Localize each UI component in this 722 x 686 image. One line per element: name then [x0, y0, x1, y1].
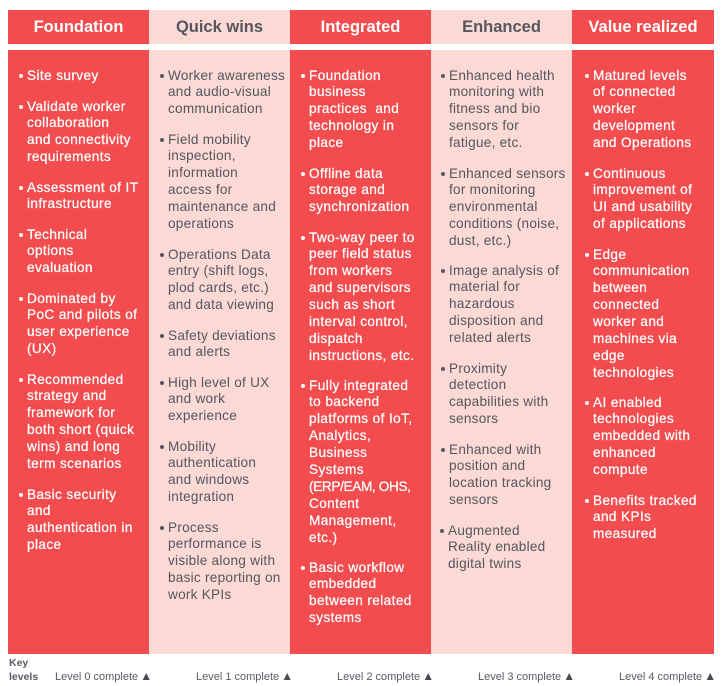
bullet: plod cards, etc.) — [168, 280, 269, 295]
bullet — [19, 290, 137, 358]
bullet: Enhanced health — [449, 68, 555, 82]
bullet — [585, 492, 697, 543]
bullet: Continuous — [593, 166, 666, 180]
bullet: Proximity — [449, 360, 507, 376]
bullet: platforms of IoT, — [309, 411, 413, 426]
key: level 3: Level 3 complete ▲ — [478, 669, 575, 683]
header: Foundation: Foundation — [34, 18, 123, 36]
key levels label: Key — [9, 657, 28, 669]
bullet: AI enabled — [593, 394, 662, 410]
bullet: Fully integrated — [309, 378, 408, 392]
bullet: improvement of — [593, 182, 692, 197]
key levels label: levels — [9, 671, 38, 683]
bullet: Recommended — [27, 372, 124, 386]
bullet: Edge — [593, 246, 626, 262]
bullet: and — [27, 503, 51, 518]
bullet — [585, 246, 690, 382]
bullet — [585, 68, 692, 152]
bullet: Enhanced with — [449, 442, 541, 456]
bullet: information — [168, 165, 238, 180]
bullet: disposition and — [449, 313, 543, 328]
bullet: monitoring with — [449, 84, 544, 99]
bullet: basic reporting on — [168, 570, 281, 585]
bullet: PoC and pilots of — [27, 307, 137, 322]
bullet: peer field status — [309, 246, 412, 261]
bullet: development — [593, 118, 675, 133]
bullet: Benefits tracked — [593, 492, 697, 508]
bullet: Operations Data — [168, 246, 271, 262]
bullet: storage and — [309, 182, 385, 197]
panel: Enhanced — [431, 50, 572, 654]
header: Quick wins: Quick wins — [176, 18, 263, 36]
bullet: worker — [593, 101, 636, 116]
bullet: Assessment of IT — [27, 180, 138, 194]
bullet: Offline data — [309, 166, 383, 180]
bullet: Safety deviations — [168, 328, 276, 342]
bullet: communication — [593, 263, 690, 278]
bullet: and KPIs — [593, 509, 651, 524]
header: Quick wins — [149, 10, 290, 44]
bullet: measured — [593, 526, 657, 541]
bullet — [585, 394, 690, 479]
bullet: practices and — [309, 101, 399, 116]
bullet: between — [593, 280, 647, 295]
bullet: Mobility — [168, 438, 216, 454]
bullet — [19, 486, 133, 554]
bullet — [441, 360, 548, 428]
bullet — [441, 166, 566, 250]
key: level 0: Level 0 complete ▲ — [55, 669, 152, 683]
bullet: Basic workflow — [309, 560, 404, 574]
bullet: Matured levels — [593, 68, 687, 82]
bullet: communication — [168, 101, 263, 116]
bullet: to backend — [309, 394, 380, 409]
bullet: and windows — [168, 472, 249, 487]
bullet: and data viewing — [168, 297, 274, 312]
header: Enhanced — [431, 10, 572, 44]
bullet: and connectivity — [27, 132, 131, 147]
bullet: conditions (noise, — [449, 216, 559, 231]
bullet — [301, 230, 415, 365]
bullet: business — [309, 84, 366, 99]
header: Integrated: Integrated — [321, 18, 400, 36]
bullet: Technical — [27, 226, 87, 242]
bullet: location tracking — [449, 475, 551, 490]
bullet: Worker awareness — [168, 68, 285, 82]
bullet: and alerts — [168, 344, 230, 359]
bullet: sensors — [449, 411, 498, 426]
bullet: requirements — [27, 149, 111, 164]
bullet: hazardous — [449, 296, 515, 311]
key: level 4: Level 4 complete ▲ — [619, 669, 716, 683]
bullet: High level of UX — [168, 374, 269, 390]
panel: Value realized — [572, 50, 714, 654]
bullet: operations — [168, 216, 234, 231]
bullet: dispatch — [309, 331, 363, 346]
bullet — [160, 246, 274, 314]
bullet — [301, 166, 409, 216]
bullet — [441, 442, 551, 509]
bullet: authentication — [168, 455, 256, 470]
bullet: experience — [168, 408, 237, 423]
bullet: fitness and bio — [449, 101, 540, 116]
panel: Foundation — [8, 50, 149, 654]
bullet: embedded — [309, 576, 376, 591]
bullet: collaboration — [27, 115, 109, 130]
bullet: term scenarios — [27, 456, 122, 471]
bullet: Systems — [309, 462, 364, 477]
bullet: from workers — [309, 263, 392, 278]
bullet: interval control, — [309, 314, 408, 329]
bullet — [441, 262, 559, 347]
bullet: environmental — [449, 199, 538, 214]
bullet: Basic security — [27, 486, 116, 502]
bullet: evaluation — [27, 260, 93, 275]
bullet: user experience — [27, 324, 130, 339]
header: Integrated — [290, 10, 431, 44]
bullet: integration — [168, 489, 234, 504]
bullet — [19, 98, 131, 166]
header: Enhanced: Enhanced — [462, 18, 541, 36]
bullet: and work — [168, 391, 225, 406]
bullet: Two-way peer to — [309, 230, 415, 244]
bullet: visible along with — [168, 553, 275, 568]
bullet: options — [27, 243, 74, 258]
panel: Integrated — [290, 50, 431, 654]
bullet — [301, 560, 412, 627]
bullet — [440, 522, 545, 573]
bullet: worker and — [593, 314, 664, 329]
bullet: (ERP/EAM, OHS, — [309, 479, 411, 494]
bullet: material for — [449, 279, 520, 294]
bullet: entry (shift logs, — [168, 263, 268, 278]
bullet — [160, 328, 276, 361]
bullet: technologies — [593, 411, 674, 426]
bullet — [441, 68, 555, 152]
bullet: performance is — [168, 536, 261, 551]
bullet: edge — [593, 348, 625, 363]
bullet: capabilities with — [449, 394, 548, 409]
bullet — [160, 374, 269, 425]
key levels label — [9, 657, 38, 683]
bullet: dust, etc.) — [449, 233, 511, 248]
bullet: place — [27, 537, 62, 552]
key: level 1: Level 1 complete ▲ — [196, 669, 293, 683]
bullet: fatigue, etc. — [449, 135, 523, 150]
bullet — [19, 226, 93, 277]
bullet: (UX) — [27, 341, 57, 356]
bullet: framework for — [27, 405, 115, 420]
bullet: sensors for — [449, 118, 519, 133]
bullet: Business — [309, 445, 367, 460]
bullet: connected — [593, 297, 659, 312]
bullet: sensors — [449, 492, 498, 507]
bullet: position and — [449, 458, 525, 473]
bullet: strategy and — [27, 388, 107, 403]
bullet — [19, 180, 138, 213]
bullet: Foundation — [309, 68, 381, 82]
bullet: infrastructure — [27, 196, 112, 211]
bullet: related alerts — [449, 330, 531, 345]
bullet: enhanced — [593, 445, 656, 460]
bullet: digital twins — [448, 556, 522, 571]
bullet: etc.) — [309, 530, 337, 545]
bullet: inspection, — [168, 148, 236, 163]
bullet: Site survey — [27, 68, 99, 82]
bullet: Augmented — [448, 522, 520, 538]
bullet: embedded with — [593, 428, 690, 443]
bullet — [160, 132, 276, 233]
panel: Quick wins — [149, 50, 290, 654]
bullet — [160, 438, 256, 506]
header: Value realized — [572, 10, 714, 44]
bullet: maintenance and — [168, 199, 276, 214]
bullet: Image analysis of — [449, 262, 559, 278]
bullet: detection — [449, 377, 506, 392]
bullet: Reality enabled — [448, 539, 545, 554]
bullet: and supervisors — [309, 280, 411, 295]
bullet: Dominated by — [27, 290, 116, 306]
bullet: Field mobility — [168, 132, 251, 146]
bullet: Enhanced sensors — [449, 166, 566, 180]
bullet: work KPIs — [168, 587, 231, 602]
bullet: between related — [309, 593, 412, 608]
bullet: technologies — [593, 365, 674, 380]
bullet — [19, 372, 134, 473]
bullet: such as short — [309, 297, 395, 312]
bullet: wins) and long — [27, 439, 120, 454]
bullet: systems — [309, 610, 362, 625]
bullet: UI and usability — [593, 199, 692, 214]
bullet: instructions, etc. — [309, 348, 414, 363]
bullet: place — [309, 135, 344, 150]
bullet — [160, 520, 281, 604]
bullet: of applications — [593, 216, 686, 231]
bullet — [301, 378, 413, 547]
bullet — [585, 166, 692, 233]
bullet: technology in — [309, 118, 394, 133]
bullet: Validate worker — [27, 98, 126, 114]
bullet: for monitoring — [449, 182, 536, 197]
bullet: Management, — [309, 513, 397, 528]
bullet: and Operations — [593, 135, 692, 150]
bullet: machines via — [593, 331, 677, 346]
header: Foundation — [8, 10, 149, 44]
bullet: access for — [168, 182, 232, 197]
bullet: both short (quick — [27, 422, 134, 437]
bullet: Content — [309, 496, 359, 511]
key: level 2: Level 2 complete ▲ — [337, 669, 434, 683]
bullet: Process — [168, 520, 219, 534]
bullet: compute — [593, 462, 648, 477]
bullet: authentication in — [27, 520, 133, 535]
bullet: of connected — [593, 84, 676, 99]
bullet: synchronization — [309, 199, 409, 214]
bullet: and audio-visual — [168, 84, 271, 99]
bullet: Analytics, — [309, 428, 371, 443]
bullet — [160, 68, 285, 118]
header: Value realized: Value realized — [588, 18, 698, 36]
bullet — [301, 68, 399, 152]
